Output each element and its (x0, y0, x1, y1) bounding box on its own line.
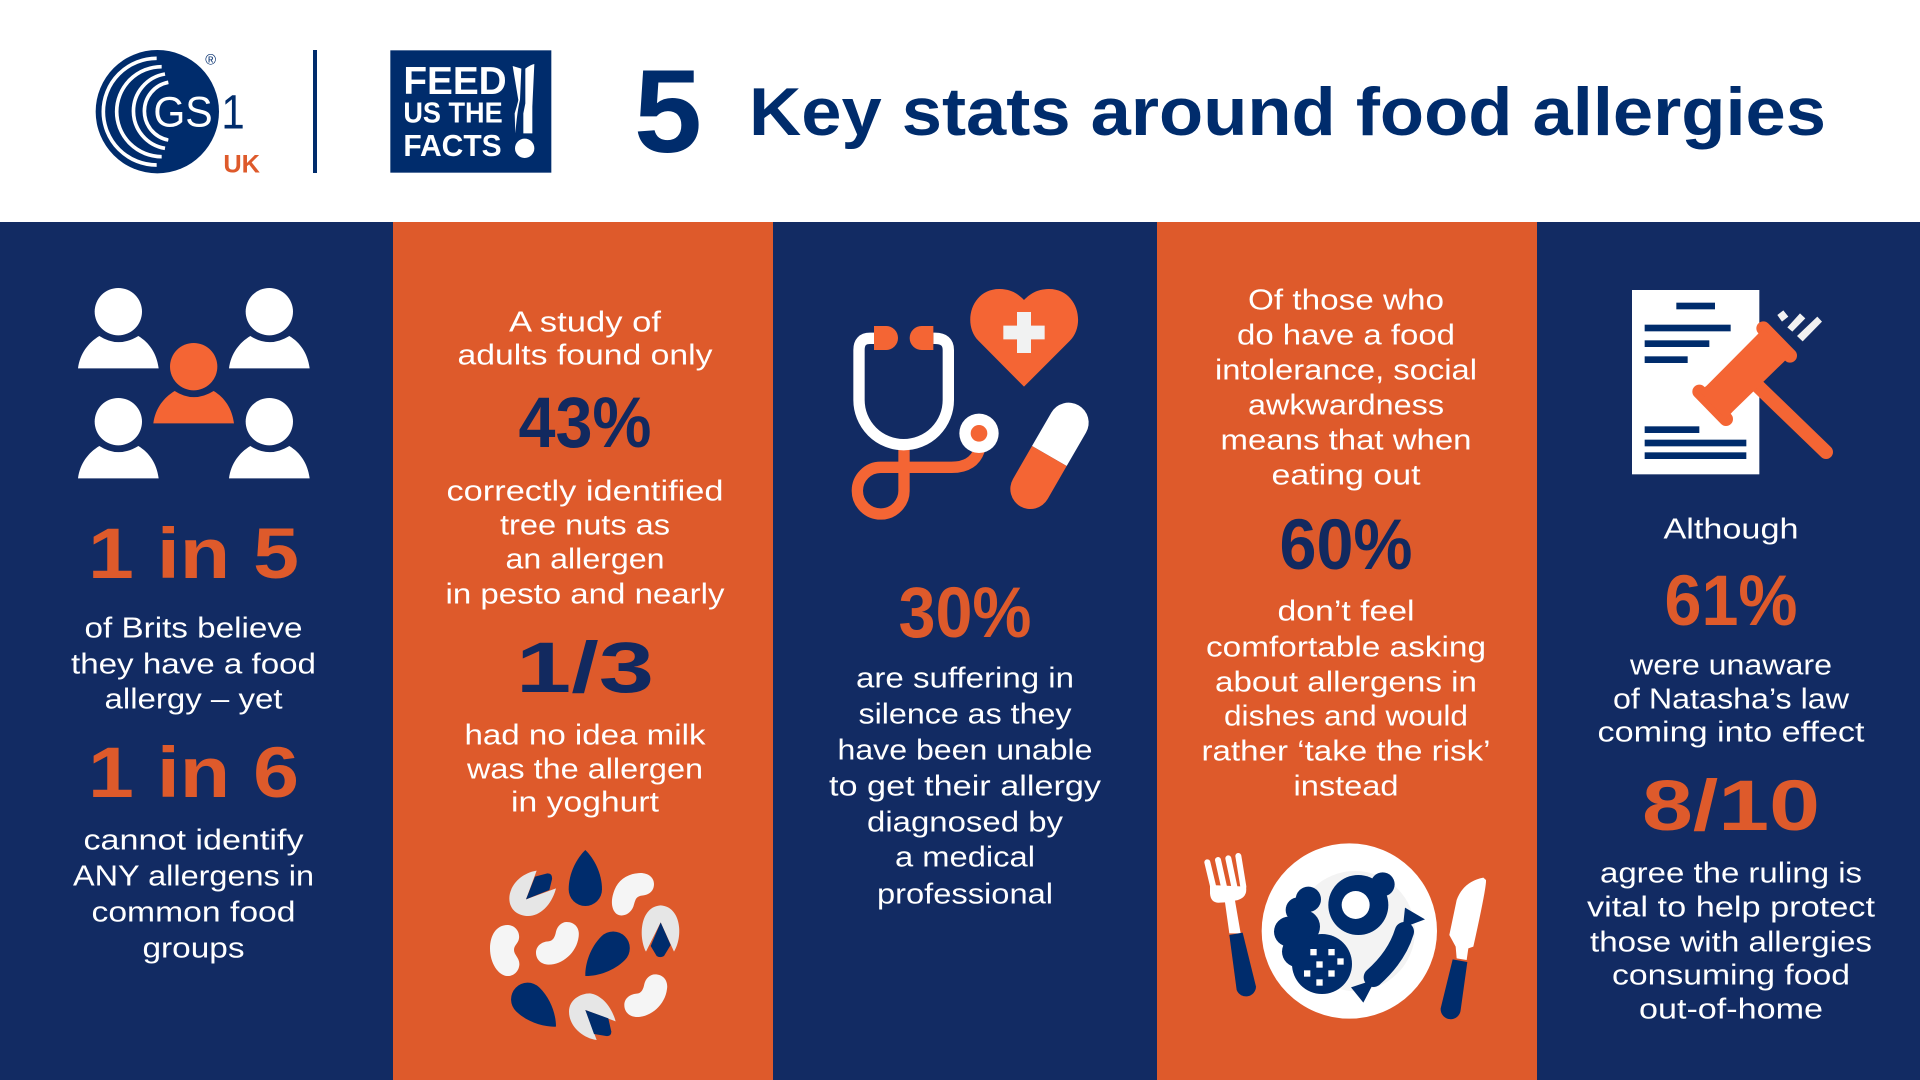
stat: 30%: 30% (898, 574, 1032, 653)
text: take the risk: comfortable asking (1206, 632, 1486, 664)
text: intolerance intro (1215, 284, 1477, 492)
stat: 1 in 5: 1 in 5 (88, 515, 299, 594)
text: tree nuts: in pesto and nearly (446, 578, 725, 610)
text: cannot identify: common food (92, 896, 296, 928)
text: intolerance intro: awkwardness (1248, 390, 1444, 422)
logo: Feed Us The Facts (390, 50, 551, 173)
text: intolerance intro: do have a food (1237, 320, 1455, 352)
logo: Feed Us The Facts: FEED (403, 59, 507, 103)
logo: Feed Us The Facts: US THE (403, 98, 503, 130)
stat: 60%: 60% (1280, 506, 1412, 585)
text: suffering in silence: a medical (895, 842, 1035, 874)
header band (0, 0, 1920, 222)
text: ruling: agree the ruling is (1600, 858, 1862, 890)
logo: Feed Us The Facts: FACTS (403, 129, 502, 163)
text: take the risk: about allergens in (1215, 666, 1477, 698)
panel: 30% (773, 222, 1157, 1080)
text: cannot identify: groups (142, 932, 244, 964)
logo: GS1 UK: 1 (221, 85, 245, 139)
text: take the risk: dishes and would (1224, 700, 1468, 732)
icon: plate with cutlery (1207, 843, 1486, 1019)
panel: 1 in 5 (0, 222, 393, 1080)
numeral 5: 5 (634, 46, 702, 178)
text: Brits believe (71, 612, 316, 716)
text: tree nuts: correctly identified (446, 476, 724, 508)
text: Brits believe: allergy – yet (104, 684, 282, 716)
logo: GS1 UK (96, 50, 261, 178)
text: Brits believe: they have a food (71, 648, 316, 680)
text: suffering in silence: silence as they (858, 698, 1072, 730)
text: Natasha's law: of Natasha’s law (1613, 684, 1850, 716)
text: study intro: A study of (509, 306, 662, 338)
stat: 1/3: 1/3 (516, 629, 654, 708)
text: take the risk: instead (1294, 770, 1398, 802)
title: Key stats around food allergies (749, 74, 1826, 150)
logo: GS1 UK: GS (153, 89, 213, 137)
text: ruling: vital to help protect (1587, 892, 1875, 924)
text: milk: had no idea milk (464, 720, 706, 752)
text: although: Although (1664, 514, 1798, 546)
text: suffering in silence: have been unable (838, 734, 1092, 766)
text: cannot identify: cannot identify (84, 824, 304, 856)
stat: 43%: 43% (518, 384, 652, 463)
text: take the risk: rather ‘take the risk’ (1202, 736, 1490, 768)
text: Natasha's law: coming into effect (1598, 716, 1864, 748)
text: take the risk: don’t feel (1278, 596, 1414, 628)
text: study intro: adults found only (458, 340, 713, 372)
text: suffering in silence: diagnosed by (867, 806, 1064, 838)
text: suffering in silence (829, 662, 1102, 910)
text: suffering in silence: are suffering in (856, 662, 1074, 694)
panel: 43% (393, 222, 773, 1080)
text: intolerance intro: intolerance, social (1215, 354, 1477, 386)
text: milk: in yoghurt (511, 786, 659, 818)
icon: stethoscope, heart and pill (857, 289, 1089, 514)
text: study intro (458, 306, 713, 372)
text: ruling: out-of-home (1639, 994, 1823, 1026)
stat: 61%: 61% (1664, 562, 1798, 641)
text: Brits believe: of Brits believe (84, 612, 302, 644)
text: milk (464, 720, 706, 818)
text: Natasha's law: were unaware (1629, 650, 1832, 682)
icon: group of people (78, 288, 310, 478)
text: ruling: consuming food (1612, 960, 1850, 992)
icon: document and gavel (1632, 290, 1826, 474)
icon: nuts (490, 850, 679, 1040)
text: intolerance intro: eating out (1272, 460, 1420, 492)
text: tree nuts (446, 476, 725, 610)
text: suffering in silence: to get their allergy (829, 770, 1102, 802)
text: take the risk (1202, 596, 1490, 802)
logo divider (313, 50, 317, 173)
text: tree nuts: tree nuts as (500, 510, 670, 542)
text: cannot identify (73, 824, 314, 964)
panel: 60% (1157, 222, 1537, 1080)
text: cannot identify: ANY allergens in (73, 860, 314, 892)
logo: GS1 UK: ® (205, 53, 216, 69)
text: Natasha's law (1598, 650, 1864, 748)
text: intolerance intro: means that when (1220, 424, 1472, 456)
text: intolerance intro: Of those who (1248, 284, 1444, 316)
text: ruling: those with allergies (1590, 926, 1872, 958)
logo: GS1 UK: UK (223, 150, 261, 178)
text: suffering in silence: professional (877, 878, 1053, 910)
text: ruling (1587, 858, 1875, 1026)
stat: 8/10: 8/10 (1642, 767, 1820, 846)
panel: 61% and 8/10 (1537, 222, 1920, 1080)
stat: 1 in 6: 1 in 6 (88, 734, 299, 813)
text: tree nuts: an allergen (506, 544, 664, 576)
text: milk: was the allergen (466, 754, 703, 786)
